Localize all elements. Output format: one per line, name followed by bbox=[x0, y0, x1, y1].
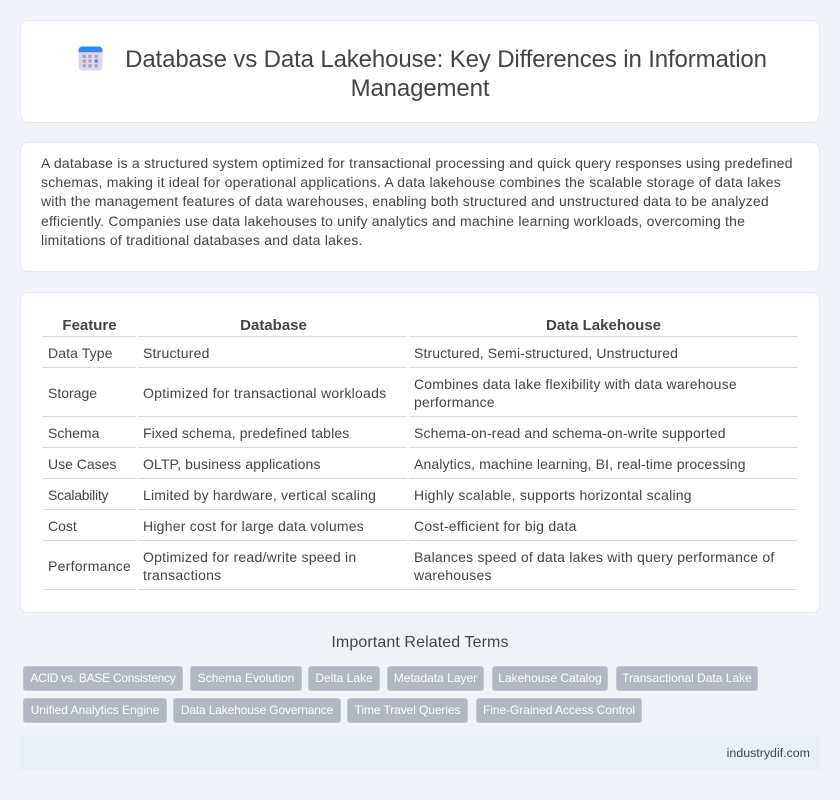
row: use cases bbox=[48, 456, 746, 472]
row: storage bbox=[48, 376, 737, 410]
tags: related terms bbox=[23, 666, 758, 723]
panel: introduction bbox=[20, 142, 820, 272]
title: Management bbox=[351, 74, 489, 102]
intro text: A database is a structured system optimized for transactional processing and quick query responses using predefined bbox=[41, 155, 793, 171]
intro text: limitations of traditional databases and data lakes. bbox=[41, 232, 363, 248]
tags: related terms: Lakehouse Catalog bbox=[498, 670, 602, 684]
intro text bbox=[41, 155, 793, 248]
intro text: efficiently. Companies use data lakehouses to unify analytics and machine learning workloads, overcoming the bbox=[41, 213, 745, 229]
row: use cases: Use Cases bbox=[48, 456, 116, 472]
footer bar bbox=[20, 736, 820, 770]
table header: Feature bbox=[62, 317, 117, 334]
row: performance bbox=[48, 549, 775, 583]
table header bbox=[62, 317, 661, 334]
row: scalability: Scalability bbox=[48, 487, 108, 503]
row: schema: Schema bbox=[48, 425, 99, 441]
row: cost: Cost bbox=[48, 518, 77, 534]
row: storage: performance bbox=[414, 394, 495, 410]
tags: related terms: Delta Lake bbox=[315, 670, 373, 684]
tags: related terms: Transactional Data Lake bbox=[622, 670, 752, 684]
row: cost: Higher cost for large data volumes bbox=[143, 518, 364, 534]
row: performance: transactions bbox=[143, 567, 221, 583]
row: storage: Combines data lake flexibility with data warehouse bbox=[414, 376, 737, 392]
row: scalability bbox=[48, 487, 692, 503]
row: performance: warehouses bbox=[414, 567, 492, 583]
row: schema: Fixed schema, predefined tables bbox=[143, 425, 349, 441]
table header: Database bbox=[240, 317, 307, 334]
panel: title header bbox=[20, 20, 820, 123]
row: performance: Optimized for read/write speed in bbox=[143, 549, 356, 565]
row: cost: Cost-efficient for big data bbox=[414, 518, 577, 534]
row: cost bbox=[48, 518, 577, 534]
tags: related terms: Fine-Grained Access Control bbox=[483, 702, 635, 716]
intro text: with the management features of data warehouses, enabling both structured and unstructured data to be analyzed bbox=[41, 193, 769, 209]
footer source: industrydif.com bbox=[727, 746, 810, 760]
tags: related terms: Data Lakehouse Governance bbox=[181, 702, 333, 716]
intro text: schemas, making it ideal for operational applications. A data lakehouse combines the scalable storage of data lakes bbox=[41, 174, 781, 190]
row: use cases: OLTP, business applications bbox=[143, 456, 321, 472]
title bbox=[125, 46, 767, 102]
row: performance: Performance bbox=[48, 558, 131, 574]
table header: Data Lakehouse bbox=[546, 317, 661, 334]
tags: related terms: ACID vs. BASE Consistency bbox=[30, 670, 176, 684]
tags: related terms: Time Travel Queries bbox=[355, 702, 460, 716]
row: performance: Balances speed of data lakes with query performance of bbox=[414, 549, 775, 565]
row: data type: Data Type bbox=[48, 345, 112, 361]
heading: related terms: Important Related Terms bbox=[331, 634, 509, 651]
tags: related terms: Metadata Layer bbox=[394, 670, 477, 684]
row: scalability: Limited by hardware, vertical scaling bbox=[143, 487, 376, 503]
tags: related terms: Unified Analytics Engine bbox=[31, 702, 159, 716]
row: data type: Structured, Semi-structured, Unstructured bbox=[414, 345, 678, 361]
row: data type: Structured bbox=[143, 345, 210, 361]
row: scalability: Highly scalable, supports horizontal scaling bbox=[414, 487, 692, 503]
icon: calendar grid bbox=[78, 46, 102, 70]
row: data type bbox=[48, 345, 678, 361]
row: storage: Optimized for transactional workloads bbox=[143, 385, 386, 401]
row: schema: Schema-on-read and schema-on-write supported bbox=[414, 425, 726, 441]
panel: comparison table bbox=[20, 292, 820, 613]
row: storage: Storage bbox=[48, 385, 97, 401]
row: use cases: Analytics, machine learning, BI, real-time processing bbox=[414, 456, 746, 472]
title: Database vs Data Lakehouse: Key Differences in Information bbox=[125, 46, 767, 73]
rules bbox=[43, 336, 136, 337]
tags: related terms: Schema Evolution bbox=[198, 670, 294, 684]
row: schema bbox=[48, 425, 726, 441]
